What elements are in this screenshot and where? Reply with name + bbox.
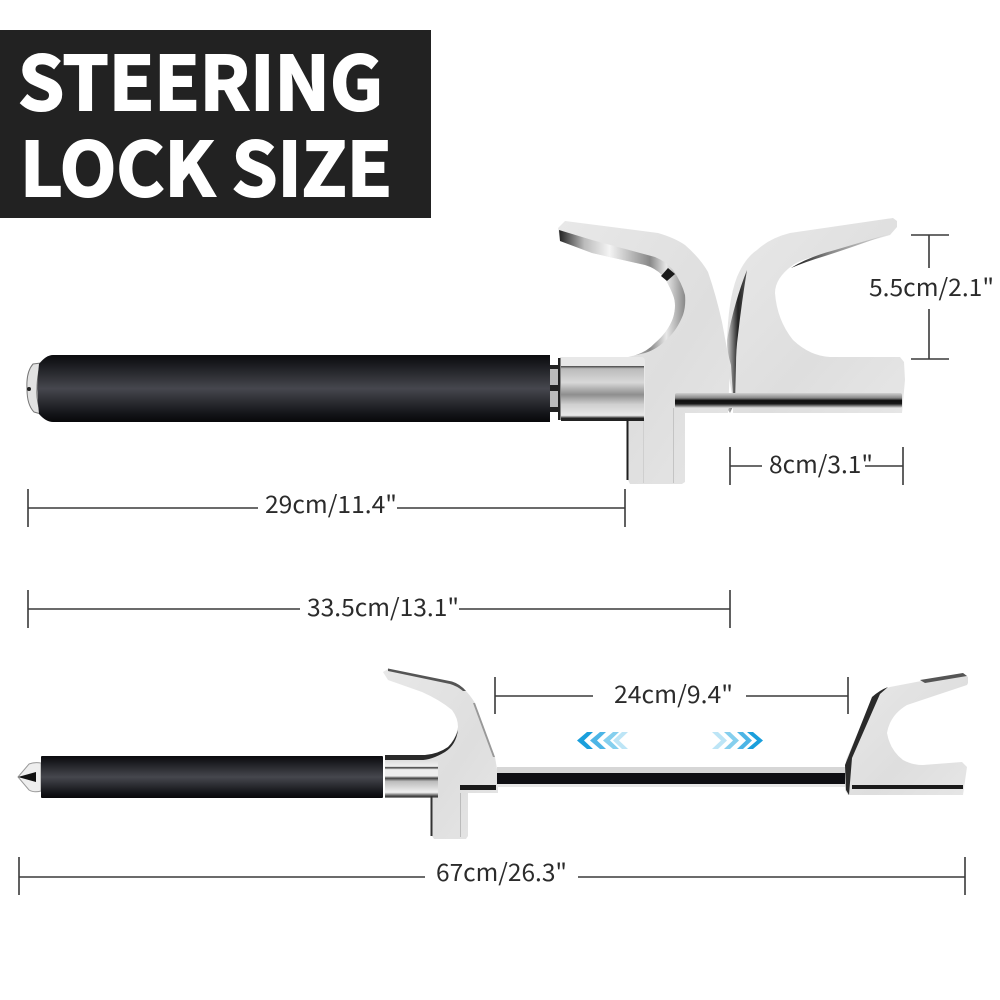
arrows: retract left bbox=[577, 732, 628, 749]
arrows: extend right bbox=[712, 732, 763, 749]
collar rings bbox=[550, 365, 559, 412]
dimension: 5.5cm bbox=[869, 235, 994, 359]
sliding bar dark bbox=[497, 773, 847, 784]
left jaw inner bevel bbox=[559, 230, 685, 357]
gap between jaws bbox=[727, 270, 747, 413]
right jaw inner bevel bbox=[791, 234, 889, 268]
cylinder left edge bbox=[558, 358, 560, 420]
dimension: 29cm: 29cm/11.4" bbox=[265, 485, 397, 520]
jaw rail strip bbox=[460, 785, 496, 790]
dimension: 24cm bbox=[495, 675, 848, 714]
steering lock, extended bbox=[18, 668, 968, 839]
T-bar second facet bbox=[643, 421, 644, 483]
black handle bbox=[38, 355, 550, 422]
right jaw top shadow bbox=[920, 673, 967, 683]
left jaw and T-bar bbox=[383, 669, 498, 839]
jaw outer edge shadow bbox=[473, 703, 495, 757]
T-bar shadow bbox=[626, 419, 628, 480]
T-bar facet bbox=[673, 408, 674, 483]
tip point bbox=[18, 772, 36, 782]
cylinder body bbox=[561, 366, 644, 421]
end cap screw bbox=[27, 387, 31, 391]
left jaw and T-bar bbox=[558, 221, 730, 484]
cylinder bbox=[385, 760, 438, 798]
jaw inner shadow bbox=[385, 730, 458, 760]
dimension: 8cm bbox=[730, 445, 903, 485]
dimension: 5.5cm: 5.5cm/2.1" bbox=[869, 268, 994, 303]
title banner bbox=[0, 25, 431, 218]
right jaw strip bbox=[852, 785, 963, 789]
right jaw bbox=[727, 218, 905, 413]
right jaw outer shadow bbox=[845, 687, 888, 795]
bevel dark patch bbox=[661, 268, 675, 281]
dimension: 33.5cm: 33.5cm/13.1" bbox=[307, 588, 459, 623]
title line 1: STEERING bbox=[18, 25, 383, 132]
collar bbox=[550, 365, 559, 412]
T-bar facet bbox=[460, 793, 461, 837]
jaw top edge shadow bbox=[388, 668, 466, 691]
steering lock, closed bbox=[27, 218, 905, 484]
dimension: 67cm: 67cm/26.3" bbox=[436, 853, 567, 888]
dimension: 33.5cm bbox=[28, 588, 730, 628]
dark rail strip bbox=[675, 393, 902, 408]
sliding bar bbox=[497, 767, 847, 773]
end cap bbox=[27, 363, 41, 414]
dimension: 67cm bbox=[19, 853, 965, 895]
cylinder bbox=[559, 357, 645, 421]
title line 2: LOCK SIZE bbox=[20, 111, 392, 218]
dimension: 24cm: 24cm/9.4" bbox=[614, 675, 733, 710]
dimension: 8cm: 8cm/3.1" bbox=[769, 445, 873, 480]
T-bar shadow bbox=[430, 796, 432, 836]
black handle bbox=[41, 756, 383, 798]
dimension: 29cm bbox=[28, 485, 625, 527]
right jaw bbox=[845, 673, 968, 795]
pointed tip bbox=[18, 763, 41, 792]
sliding bar lower bbox=[497, 784, 847, 787]
